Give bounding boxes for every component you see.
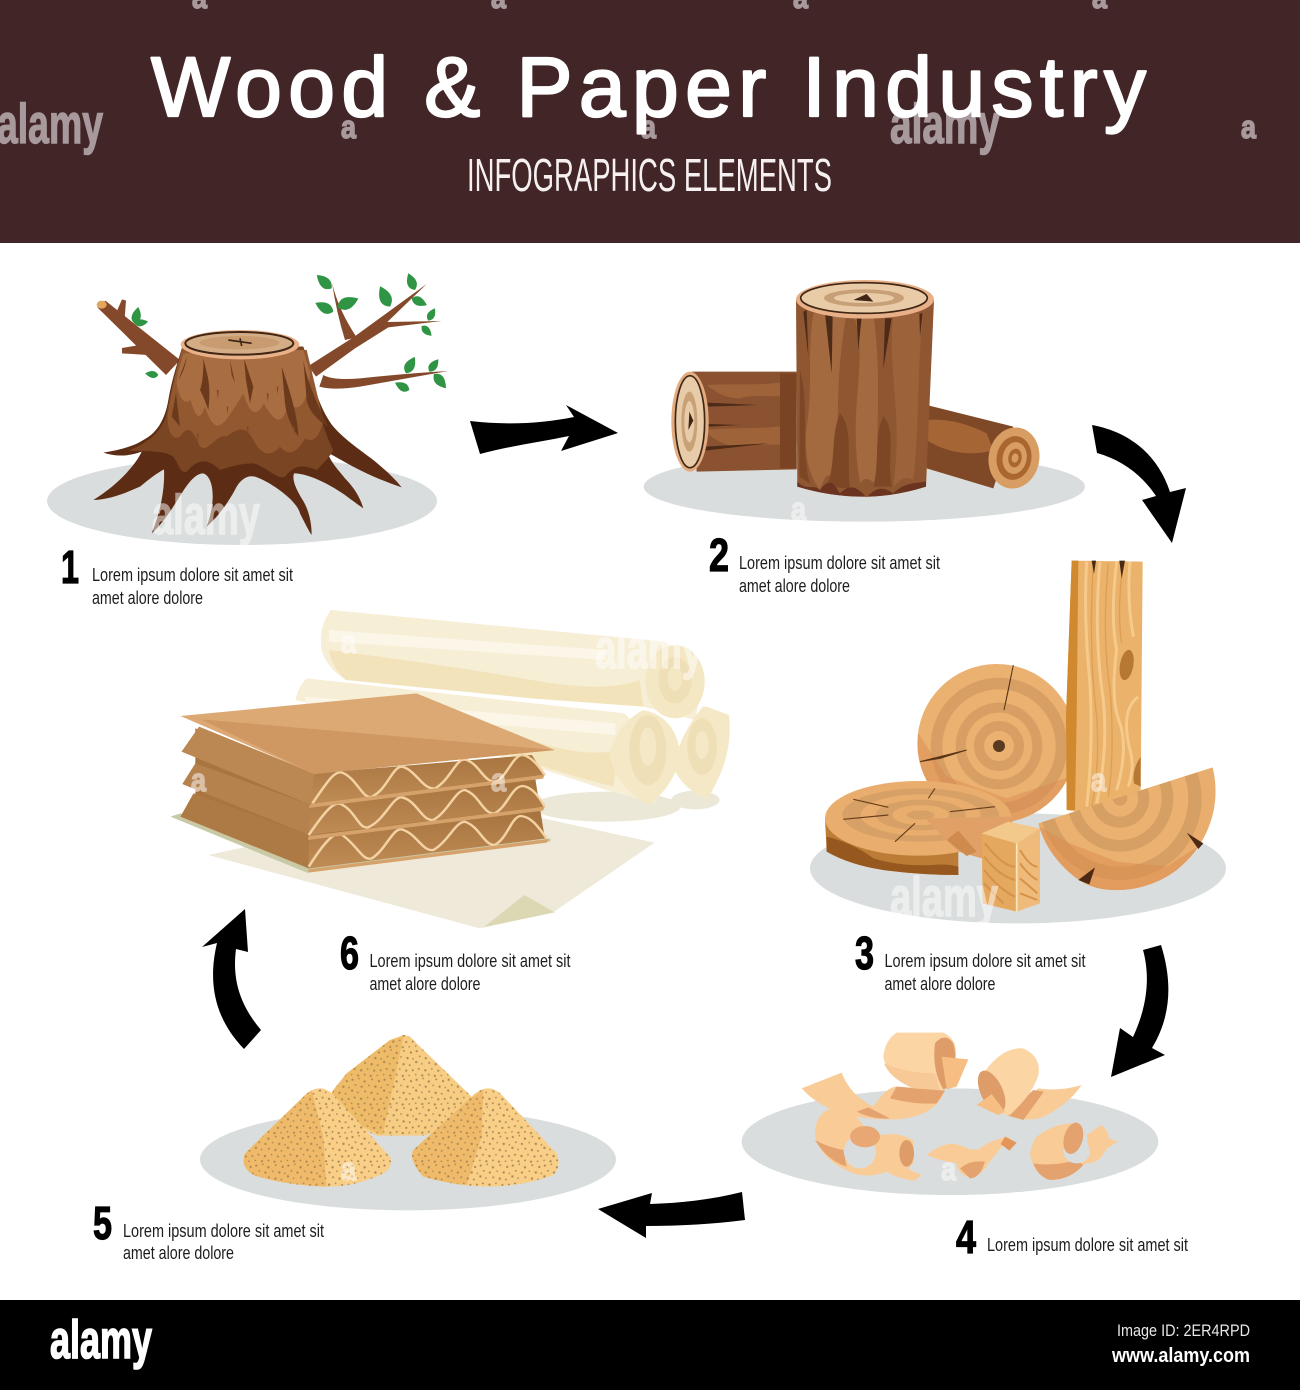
header watermarks: a	[641, 109, 656, 145]
footer bar	[0, 1300, 1300, 1390]
header watermarks: alamy	[0, 92, 103, 155]
branches	[97, 283, 448, 389]
flat disc	[825, 781, 1013, 875]
watermarks over artwork: a	[791, 491, 806, 527]
arrow: step 4 to 5	[598, 1192, 745, 1238]
caption 3	[855, 927, 1086, 994]
caption 6	[340, 927, 570, 994]
shaving: centre	[927, 1137, 1017, 1178]
caption 5	[93, 1197, 324, 1263]
cut top	[181, 330, 299, 359]
caption 3: 3	[855, 927, 874, 979]
step 5: sawdust piles	[200, 1035, 616, 1210]
top sheet	[180, 693, 555, 774]
watermarks over artwork	[152, 483, 1106, 1187]
watermarks over artwork: alamy	[595, 617, 703, 680]
header watermarks	[0, 0, 1256, 155]
paper sheet	[208, 818, 654, 928]
watermarks over artwork: alamy	[152, 483, 260, 546]
upright log	[796, 280, 934, 497]
left log	[671, 372, 797, 472]
step 6: paper and cardboard	[170, 610, 730, 928]
caption 3: Lorem ipsum dolore sit amet sit	[884, 951, 1086, 971]
caption 2: 2	[709, 529, 729, 581]
small block	[982, 822, 1040, 912]
watermarks over artwork: alamy	[890, 865, 998, 928]
caption 3: amet alore dolore	[884, 974, 996, 994]
watermarks over artwork: a	[191, 762, 206, 798]
subtitle: INFOGRAPHICS ELEMENTS	[467, 149, 832, 201]
leaves	[130, 271, 450, 394]
caption 5: 5	[93, 1197, 112, 1249]
watermarks over artwork: a	[941, 1151, 956, 1187]
paper rolls	[296, 610, 730, 805]
watermarks over artwork: a	[491, 762, 506, 798]
right log	[927, 405, 1044, 493]
roll shadows	[532, 791, 720, 822]
caption 6: 6	[340, 927, 359, 979]
watermarks over artwork: a	[1091, 762, 1106, 798]
arrow: step 1 to 2	[470, 405, 618, 454]
header watermarks: alamy	[890, 92, 1000, 155]
caption 4	[956, 1211, 1188, 1263]
watermarks over artwork: a	[341, 624, 356, 660]
header watermarks: a	[1241, 109, 1256, 145]
shaving: right	[1030, 1120, 1118, 1180]
pile: right	[412, 1088, 559, 1187]
caption 5: Lorem ipsum dolore sit amet sit	[123, 1221, 324, 1241]
caption 5: amet alore dolore	[123, 1243, 234, 1263]
footer logo: alamy	[50, 1310, 152, 1370]
caption 1: amet alore dolore	[92, 588, 203, 608]
arrow: step 3 to 4	[1111, 945, 1168, 1077]
cardboard stack	[170, 693, 555, 873]
shaving: top right	[972, 1048, 1082, 1120]
shaving: lower left	[815, 1107, 922, 1181]
layer 2	[182, 763, 545, 840]
half slice	[1038, 768, 1216, 890]
caption 4: 4	[956, 1211, 976, 1263]
stump body	[93, 343, 402, 535]
caption 6: Lorem ipsum dolore sit amet sit	[370, 951, 570, 971]
step 2: logs	[644, 280, 1085, 522]
step 4: wood shavings	[742, 1033, 1158, 1195]
layer 1	[182, 727, 545, 808]
website: www.alamy.com	[1111, 1345, 1250, 1367]
caption 6: amet alore dolore	[370, 974, 480, 994]
arrow: step 5 to 6	[202, 909, 261, 1049]
layer 3	[180, 793, 549, 873]
shaving: top left	[802, 1033, 968, 1119]
step 1: tree stump	[47, 271, 450, 545]
caption 1: 1	[61, 541, 79, 593]
image id: Image ID: 2ER4RPD	[1117, 1321, 1250, 1340]
round slice	[917, 664, 1066, 821]
caption 1	[61, 541, 293, 608]
plank	[1066, 561, 1143, 813]
arrow: step 2 to 3	[1092, 425, 1186, 543]
title: Wood & Paper Industry	[151, 40, 1149, 134]
step 3: cut timber	[810, 561, 1233, 923]
pile: centre	[323, 1035, 490, 1136]
caption 2: amet alore dolore	[739, 576, 850, 596]
header banner	[0, 0, 1300, 243]
caption 2: Lorem ipsum dolore sit amet sit	[739, 553, 940, 573]
caption 2	[709, 529, 940, 596]
pile: left	[244, 1088, 391, 1187]
caption 1: Lorem ipsum dolore sit amet sit	[92, 565, 293, 585]
watermarks over artwork: a	[341, 1151, 356, 1187]
header watermarks: a	[341, 109, 356, 145]
caption 4: Lorem ipsum dolore sit amet sit	[987, 1235, 1188, 1255]
